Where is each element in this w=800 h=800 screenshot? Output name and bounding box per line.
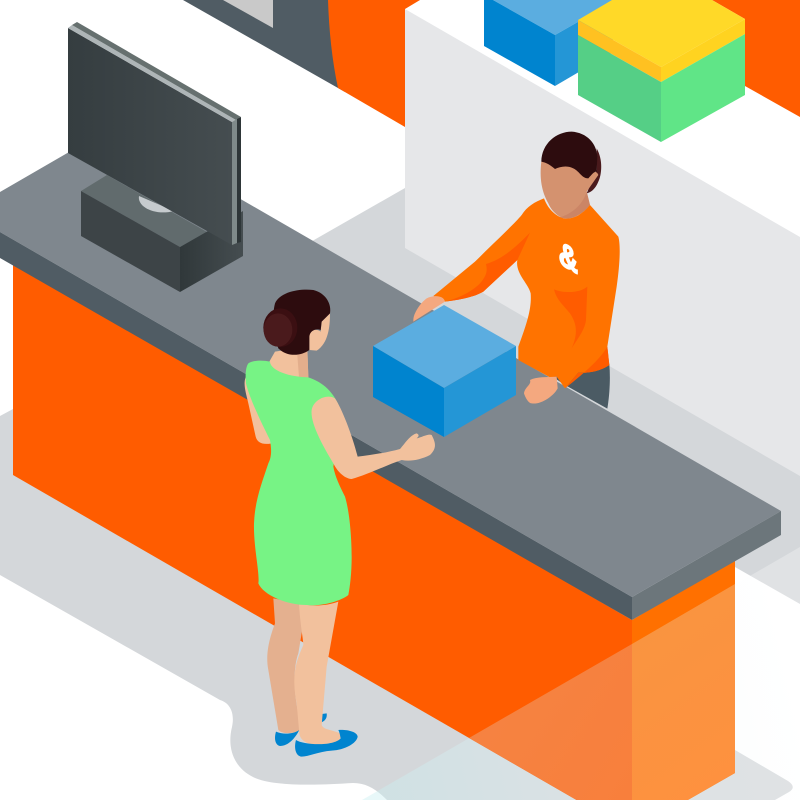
employee trousers (550, 364, 610, 409)
ampersand logo: & (559, 233, 578, 281)
employee hair bun (587, 148, 601, 193)
floor reflection overlay (362, 547, 800, 800)
customer in green dress (245, 290, 435, 605)
monitor side edge (232, 117, 241, 245)
customer far arm (245, 377, 272, 444)
sweater hem shadow (565, 347, 609, 388)
back shoe (275, 730, 299, 746)
blue box on back shelf (484, 0, 613, 86)
far shoe toe (321, 713, 327, 723)
blue parcel on counter (373, 305, 516, 437)
counter front (13, 262, 735, 800)
background wall: orange panel right (712, 0, 800, 117)
sweater arm shadow (445, 233, 530, 302)
employee face and neck (541, 157, 598, 219)
employee sweater (433, 198, 620, 388)
green box with yellow lid (578, 0, 745, 142)
employee left hand (413, 296, 445, 322)
floor in front of counter (0, 409, 793, 800)
front leg (294, 602, 341, 745)
sweater waist shadow (554, 287, 587, 348)
monitor stand foot (139, 196, 174, 212)
customer hair (273, 290, 330, 355)
customer legs and shoes (267, 598, 358, 757)
monitor base (81, 175, 243, 292)
customer hair bun (263, 308, 297, 347)
back wall panel (405, 9, 800, 476)
customer near arm and hand (312, 397, 435, 479)
green dress (246, 361, 352, 605)
counter top (0, 126, 781, 620)
customer face edge and ear (309, 313, 330, 351)
customer neck (268, 347, 308, 377)
monitor rear panel (68, 28, 232, 245)
floor behind counter (300, 180, 800, 604)
monitor top edge (68, 22, 241, 122)
monitor on counter (68, 22, 243, 292)
employee right hand (524, 377, 558, 404)
employee in orange sweater (413, 132, 620, 404)
front shoe (295, 730, 358, 757)
back leg (267, 598, 303, 733)
background wall: dark panel (183, 0, 345, 92)
background wall: orange panel left (328, 0, 420, 127)
employee hair (541, 132, 597, 178)
